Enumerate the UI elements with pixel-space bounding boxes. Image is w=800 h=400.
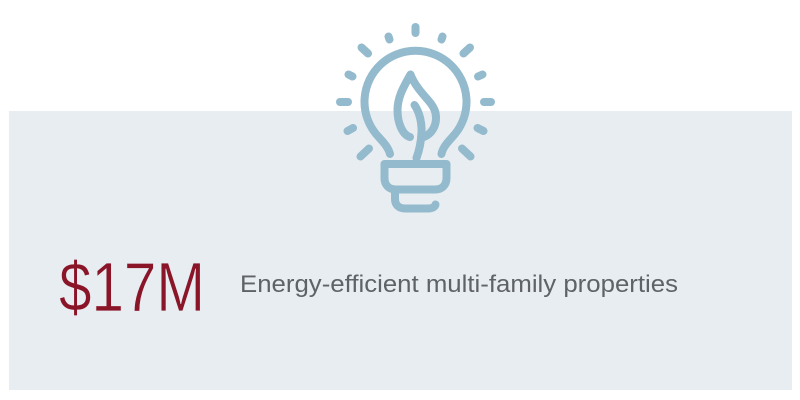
icon: light bulb with leaf — [340, 27, 491, 208]
icon: leaf outline — [398, 74, 436, 137]
description text: Energy-efficient multi-family properties — [240, 271, 678, 298]
icon: bulb base — [384, 164, 446, 190]
panel: background — [9, 111, 792, 390]
icon: bulb glass outline — [364, 51, 466, 154]
icon: light rays — [340, 27, 491, 156]
icon: leaf stem — [414, 105, 422, 158]
icon: bulb screw cap — [395, 191, 436, 208]
headline figure: $17M — [59, 248, 205, 326]
